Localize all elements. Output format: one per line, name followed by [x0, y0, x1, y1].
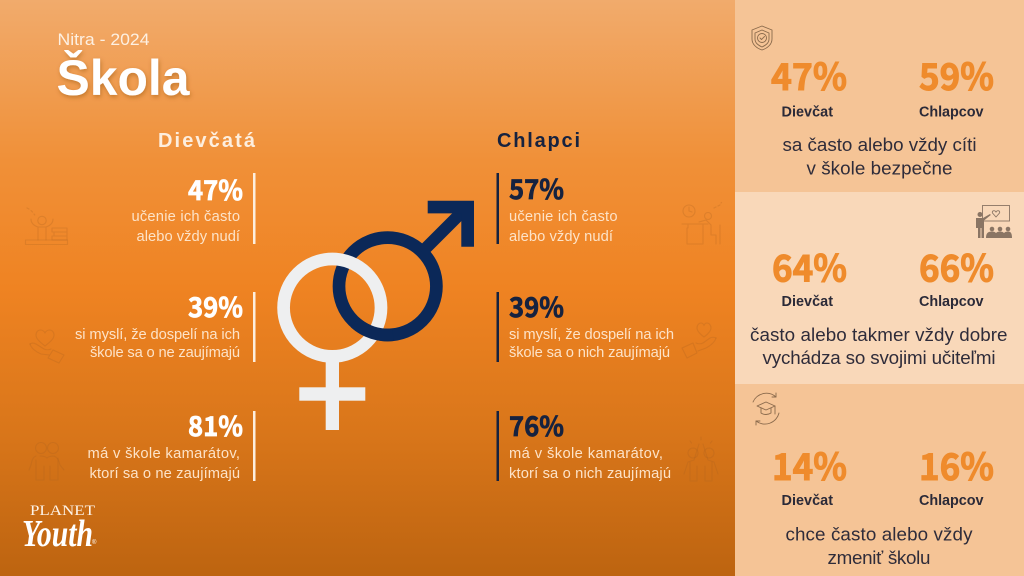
- right panel: background strips: [735, 0, 1024, 576]
- icon: teacher with pupils: [976, 206, 1012, 238]
- panel: teachers: Dievčat: [782, 294, 833, 310]
- girls stat: adults care: si myslí, že dospelí na ich: [75, 327, 240, 343]
- girls stat: friends: má v škole kamarátov,: [88, 446, 240, 462]
- boys stat: friends: ktorí sa o nich zaujímajú: [509, 466, 671, 482]
- panel: feeling safe: v škole bezpečne: [806, 158, 952, 178]
- heading: girls: Dievčatá: [158, 130, 256, 152]
- heading: boys: Chlapci: [497, 130, 580, 152]
- panel: feeling safe: Chlapcov: [919, 104, 984, 120]
- girls stat: friends: 81%: [188, 405, 243, 444]
- girls stat: adults care: škole sa o ne zaujímajú: [90, 345, 240, 361]
- panel: teachers: často alebo takmer vždy dobre: [750, 324, 1008, 345]
- icon: sleeping student with books: [26, 208, 68, 244]
- boys stat: friends: 76%: [509, 405, 564, 444]
- panel: changing school: chce často alebo vždy: [786, 524, 973, 544]
- boys stat: adults care: [496, 286, 674, 362]
- girls stat: boredom: alebo vždy nudí: [136, 229, 241, 245]
- female symbol: [284, 259, 381, 430]
- gender symbols: [284, 201, 474, 430]
- header: [56, 30, 191, 106]
- panel: teachers: vychádza so svojimi učiteľmi: [762, 347, 996, 368]
- icon: two friends (girls): [29, 442, 64, 480]
- panel: changing school: [753, 393, 994, 568]
- panel: teachers: [750, 206, 1012, 368]
- boys stat: adults care: škole sa o nich zaujímajú: [509, 345, 670, 361]
- girls stat: boredom: [132, 169, 256, 245]
- panel: feeling safe: 47%: [771, 47, 847, 101]
- girls stat: friends: ktorí sa o ne zaujímajú: [90, 466, 240, 482]
- logo: Planet Youth: [22, 503, 97, 555]
- girls stat: adults care: [75, 286, 256, 362]
- boys stat: adults care: si myslí, že dospelí na ich: [509, 327, 674, 343]
- girls stat: adults care: 39%: [188, 286, 243, 325]
- boys stat: boredom: [496, 168, 618, 245]
- icon: hand with heart (boys): [682, 323, 716, 358]
- boys stat: friends: [496, 405, 671, 482]
- panel: teachers: Chlapcov: [919, 294, 984, 310]
- logo: Planet Youth: PLANET: [30, 503, 95, 519]
- panel: teachers: 66%: [919, 238, 994, 292]
- boys stat: friends: má v škole kamarátov,: [509, 446, 663, 462]
- subtitle: Nitra - 2024: [58, 30, 150, 49]
- panel: changing school: 14%: [772, 437, 847, 491]
- icon: graduation cap with arrows: [753, 393, 779, 425]
- girls column: [75, 169, 256, 482]
- icon: two friends high five (boys): [684, 437, 718, 481]
- title: Škola: [56, 49, 191, 106]
- male symbol: [339, 201, 474, 335]
- panel: changing school: Dievčat: [782, 493, 833, 509]
- logo: Planet Youth: Youth: [22, 513, 93, 555]
- boys stat: adults care: 39%: [509, 286, 564, 325]
- panel: changing school: 16%: [919, 437, 994, 491]
- girls stat: boredom: 47%: [188, 169, 243, 208]
- girls stat: friends: [88, 405, 256, 482]
- panel: changing school: zmeniť školu: [828, 547, 930, 568]
- boys stat: boredom: učenie ich často: [509, 209, 618, 225]
- panel: teachers: 64%: [772, 238, 847, 292]
- panel: changing school: Chlapcov: [919, 493, 984, 509]
- icon: shield: [752, 26, 772, 50]
- girls stat: boredom: učenie ich často: [132, 209, 240, 225]
- panel: feeling safe: 59%: [919, 47, 994, 101]
- panel: feeling safe: [752, 26, 994, 178]
- logo: Planet Youth: ®: [92, 539, 97, 546]
- male ring overlap: [355, 322, 393, 335]
- main orange background panel: [0, 0, 735, 576]
- icon: bored student at desk: [682, 202, 722, 244]
- boys column: [496, 168, 674, 482]
- panel: feeling safe: sa často alebo vždy cíti: [782, 134, 976, 155]
- boys stat: boredom: 57%: [509, 168, 564, 207]
- boys stat: boredom: alebo vždy nudí: [509, 229, 614, 245]
- icon: hand with heart (girls): [30, 330, 64, 363]
- panel: feeling safe: Dievčat: [782, 104, 833, 120]
